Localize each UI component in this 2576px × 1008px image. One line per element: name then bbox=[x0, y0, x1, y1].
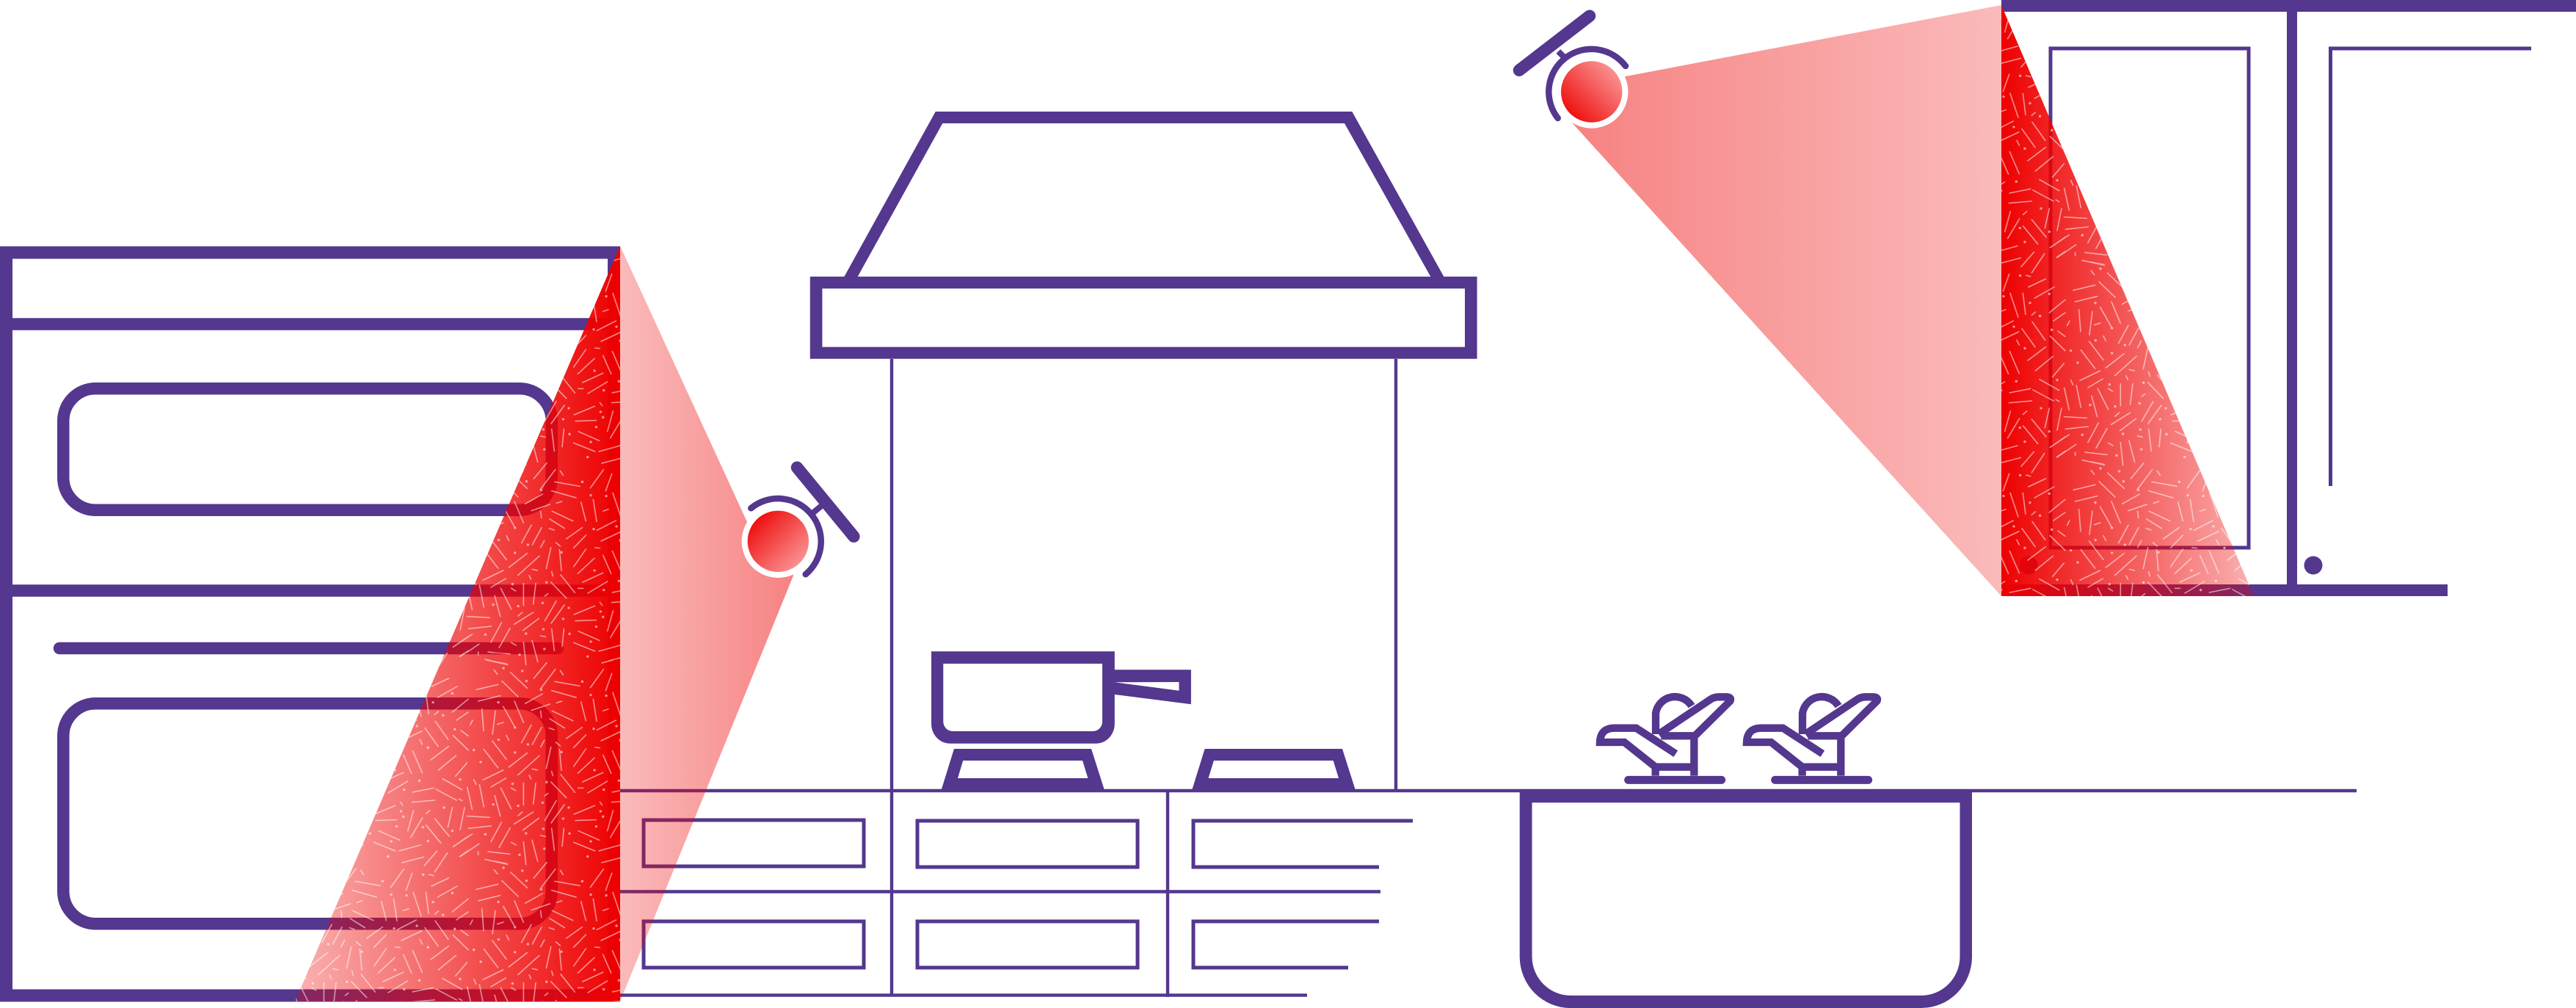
middle lower drawer bbox=[917, 921, 1138, 968]
cabinet base edge bbox=[2001, 584, 2448, 596]
left cabinet door panel bbox=[2051, 48, 2249, 548]
right door knob bbox=[2304, 556, 2322, 574]
lower oven door bbox=[63, 703, 552, 924]
icon: left camera bbox=[742, 468, 854, 578]
drawer row divider bbox=[620, 890, 1380, 893]
left coverage zone bbox=[295, 246, 620, 1001]
left backsplash and cabinet divider bbox=[890, 359, 893, 996]
wall cabinet bbox=[2001, 0, 2576, 596]
cabinet centre post bbox=[2287, 12, 2297, 584]
left door knob bbox=[2020, 556, 2037, 574]
oven outer frame bbox=[6, 253, 614, 996]
cabinet top edge bbox=[2001, 0, 2576, 12]
sink bbox=[1520, 789, 1972, 1008]
icon: right faucet bbox=[1747, 697, 1877, 780]
hood canopy bbox=[810, 277, 1477, 359]
right camera beam bbox=[1571, 5, 2001, 596]
middle upper drawer bbox=[917, 821, 1138, 867]
right coverage zone bbox=[2001, 5, 2254, 596]
cabinet divider bbox=[1166, 791, 1169, 997]
icon: left faucet bbox=[1600, 697, 1731, 780]
left upper drawer bbox=[644, 820, 864, 866]
cabinet base line bbox=[620, 993, 1307, 997]
oven handle bbox=[59, 642, 558, 654]
oven unit bbox=[0, 253, 620, 996]
countertop line bbox=[620, 789, 2357, 792]
counter and drawers bbox=[620, 359, 2357, 997]
oven top divider bbox=[0, 318, 620, 330]
right burner bbox=[1192, 749, 1355, 789]
hood chimney bbox=[844, 112, 1444, 278]
right backsplash line bbox=[1394, 359, 1397, 791]
left camera beam bbox=[620, 246, 793, 1001]
range hood bbox=[810, 112, 1477, 359]
right upper open drawer bbox=[1193, 821, 1413, 867]
icon: right camera bbox=[1519, 16, 1628, 128]
right lower open drawer bbox=[1193, 921, 1379, 968]
left lower drawer bbox=[644, 921, 864, 968]
oven middle divider bbox=[0, 584, 620, 597]
saucepan bbox=[931, 651, 1191, 744]
left burner bbox=[942, 749, 1104, 789]
right cabinet door panel bbox=[2331, 48, 2531, 486]
upper oven door bbox=[63, 388, 552, 510]
